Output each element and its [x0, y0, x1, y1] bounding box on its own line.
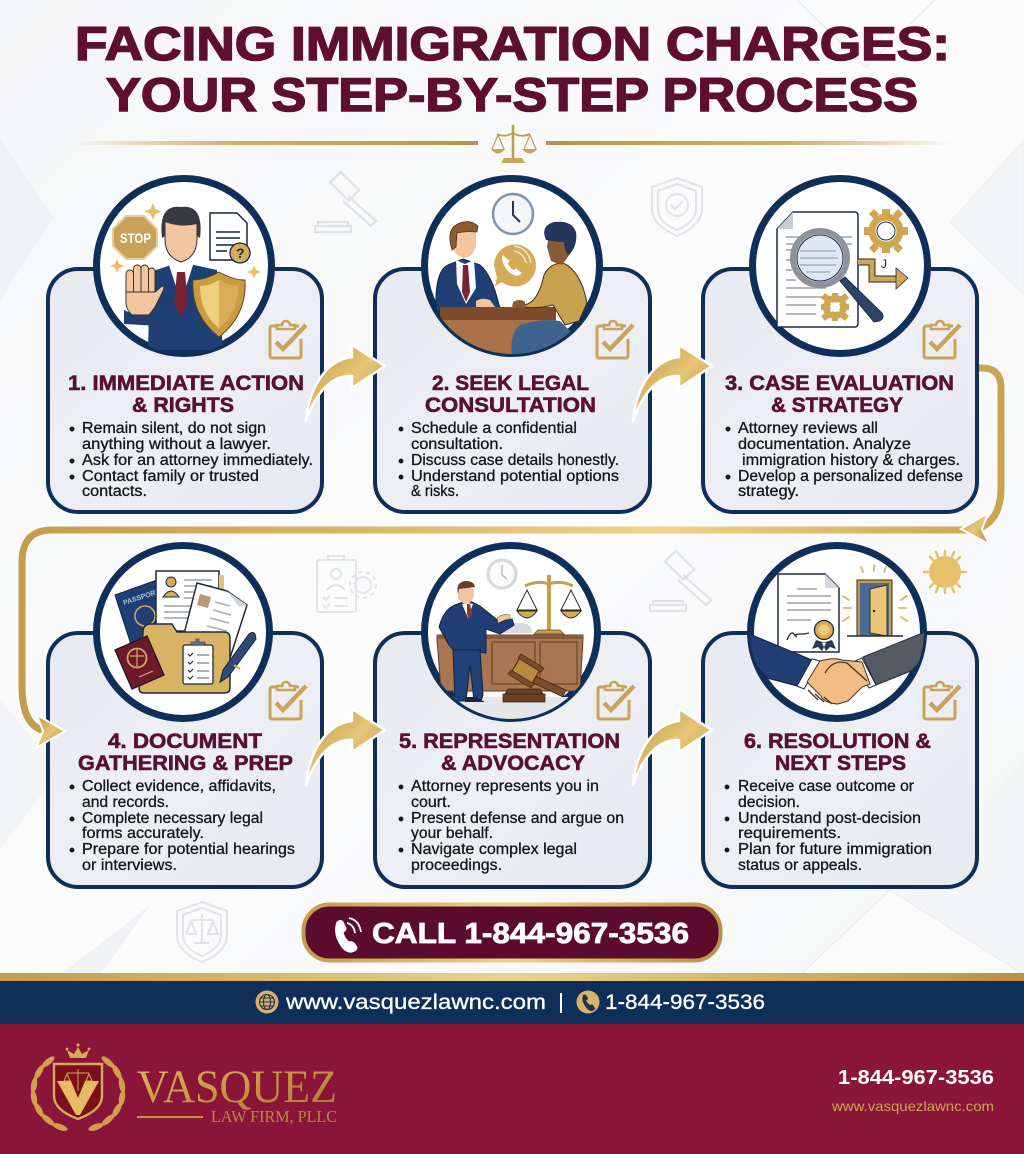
bullet list	[399, 420, 619, 500]
bullet list: Schedule a confidential	[411, 420, 577, 437]
gold band	[0, 973, 1024, 981]
icon: phone badge	[576, 990, 600, 1014]
bullet list: or interviews.	[82, 857, 177, 874]
contact bar	[0, 981, 1024, 1024]
bullet list: consultation.	[411, 436, 503, 453]
illustration: person with stop hand and shield	[96, 178, 272, 354]
icon: clipboard check	[270, 321, 306, 358]
arrow: step 2 to 3	[633, 345, 712, 421]
crown	[66, 1043, 90, 1058]
contact bar: 1-844-967-3536	[605, 991, 765, 1014]
panel: step 6 resolution	[703, 546, 977, 887]
wreath	[30, 1055, 126, 1133]
logo: crest	[30, 1043, 126, 1133]
watermark: gavel lower	[650, 551, 711, 611]
illustration: attorney consultation	[424, 178, 600, 360]
watermark: scales shield	[177, 902, 227, 962]
bullet list: & risks.	[411, 483, 459, 500]
heading	[68, 372, 304, 417]
bullet list: Understand potential options	[411, 468, 619, 485]
bullet list: Understand post-decision	[738, 810, 921, 827]
heading	[78, 730, 293, 775]
bullet list: status or appeals.	[738, 857, 862, 874]
divider with scales icon	[73, 125, 952, 163]
heading	[399, 730, 620, 775]
bullet list: forms accurately.	[82, 825, 204, 842]
icon: clipboard check	[598, 682, 634, 719]
bullet list: and records.	[82, 794, 169, 811]
hand	[126, 265, 164, 315]
bullet list: court.	[411, 794, 451, 811]
connector: step 3 to step 4	[22, 368, 1001, 748]
heading	[425, 372, 596, 417]
icon: clipboard check	[924, 321, 960, 358]
call button: CALL 1-844-967-3536	[372, 918, 689, 950]
heading: & RIGHTS	[132, 394, 234, 417]
footer contact	[831, 1066, 994, 1114]
watermark: clipboard and gear	[317, 556, 376, 612]
panel: step 5 representation	[375, 546, 650, 887]
bullet list: decision.	[738, 794, 800, 811]
bullet list: anything without a lawyer.	[82, 436, 271, 453]
call button	[304, 904, 720, 960]
illustration: person with stop hand and shield: ?	[236, 245, 245, 261]
heading: 1. IMMEDIATE ACTION	[68, 372, 304, 395]
heading	[725, 372, 954, 417]
icon: clipboard check	[924, 682, 960, 719]
heading: GATHERING & PREP	[78, 752, 293, 775]
shield	[54, 1064, 102, 1119]
watermark: shield check	[652, 178, 702, 236]
bullet list: Attorney reviews all	[738, 420, 878, 437]
bullet list	[726, 420, 963, 500]
illustration: document review magnifier	[752, 178, 928, 354]
bullet list: strategy.	[738, 483, 799, 500]
title	[75, 17, 950, 121]
bullet list: proceedings.	[411, 857, 502, 874]
bullet list	[399, 778, 624, 874]
bullet list: immigration history & charges.	[742, 452, 960, 469]
bullet list: Plan for future immigration	[738, 841, 932, 858]
bullet list: Navigate complex legal	[411, 841, 577, 858]
illustration: courtroom advocate	[424, 546, 598, 727]
illustration: handshake, certificate and door	[737, 546, 931, 718]
watermark: gavel top	[315, 172, 376, 232]
bullet list: requirements.	[738, 825, 841, 842]
icon: phone	[336, 918, 361, 952]
panel: step 2 seek legal consultation	[375, 178, 650, 512]
bullet list: Complete necessary legal	[82, 810, 263, 827]
bullet list: Discuss case details honestly.	[411, 452, 619, 469]
bullet list	[70, 778, 295, 874]
heading: & STRATEGY	[771, 394, 903, 417]
bullet list: Receive case outcome or	[738, 778, 914, 795]
bullet list: Contact family or trusted	[82, 468, 259, 485]
panel: step 3 case evaluation	[703, 178, 977, 512]
illustration: passports and documents: PASSPORT	[122, 588, 161, 607]
icon: clipboard check	[597, 321, 633, 358]
title: YOUR STEP-BY-STEP PROCESS	[106, 68, 918, 121]
bullet list: Remain silent, do not sign	[82, 420, 266, 437]
bullet list: Prepare for potential hearings	[82, 841, 295, 858]
title: FACING IMMIGRATION CHARGES:	[75, 17, 950, 70]
illustration: person with stop hand and shield: STOP	[120, 230, 151, 246]
icon: sun	[924, 551, 966, 593]
bullet list: your behalf.	[411, 825, 493, 842]
bullet list	[725, 778, 932, 874]
heading: CONSULTATION	[425, 394, 596, 417]
arrow: step 4 to 5	[306, 709, 385, 785]
footer	[0, 1024, 1024, 1154]
panel: step 4 document gathering	[48, 546, 322, 887]
logo: firm name: LAW FIRM, PLLC	[211, 1107, 337, 1126]
heading: 3. CASE EVALUATION	[725, 372, 954, 395]
heading: NEXT STEPS	[775, 752, 906, 775]
footer contact: www.vasquezlawnc.com	[831, 1098, 994, 1114]
heading: & ADVOCACY	[441, 752, 585, 775]
logo: firm name: VASQUEZ	[137, 1061, 337, 1113]
icon: clipboard check	[270, 682, 306, 719]
illustration: passports and documents	[96, 546, 270, 718]
arrow: step 1 to 2	[306, 345, 385, 421]
bullet list: Present defense and argue on	[411, 810, 624, 827]
contact bar: www.vasquezlawnc.com	[285, 991, 546, 1014]
bullet list	[70, 420, 313, 500]
bullet list: contacts.	[82, 483, 147, 500]
bullet list: documentation. Analyze	[738, 436, 911, 453]
heading: 5. REPRESENTATION	[399, 730, 620, 753]
panel: step 1 immediate action	[48, 178, 322, 512]
illustration: document review magnifier: J	[881, 257, 887, 271]
heading: 6. RESOLUTION &	[744, 730, 931, 753]
bullet list: Collect evidence, affidavits,	[82, 778, 276, 795]
icon: globe	[256, 990, 278, 1014]
heading: 4. DOCUMENT	[108, 730, 262, 753]
heading: 2. SEEK LEGAL	[432, 372, 589, 395]
bullet list: Develop a personalized defense	[738, 468, 963, 485]
heading	[744, 730, 931, 775]
bullet list: Attorney represents you in	[411, 778, 599, 795]
bullet list: Ask for an attorney immediately.	[82, 452, 313, 469]
arrow: step 5 to 6	[633, 709, 712, 785]
footer contact: 1-844-967-3536	[838, 1066, 994, 1089]
